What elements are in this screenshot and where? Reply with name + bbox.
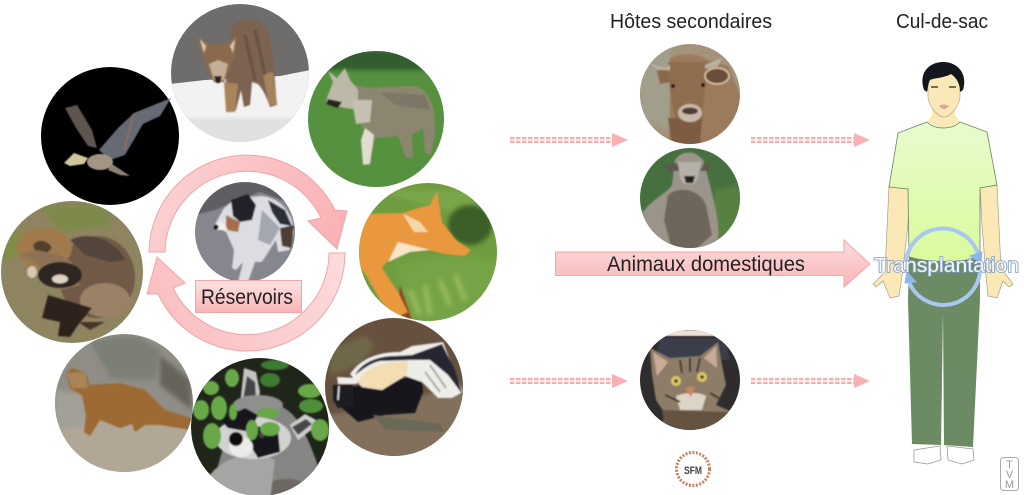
logo: TVM bbox=[1000, 458, 1018, 491]
photo: sheep bbox=[640, 148, 740, 250]
shirt bbox=[889, 122, 997, 262]
figure: human bbox=[873, 62, 1013, 464]
logo: SFM: SFM bbox=[684, 465, 702, 477]
photo: wolf bbox=[306, 50, 446, 190]
panel: secondary hosts bbox=[640, 44, 742, 432]
arms and hands bbox=[873, 185, 1013, 298]
label box: Réservoirs bbox=[196, 280, 302, 312]
neck bbox=[927, 100, 960, 130]
logo: TVM: T bbox=[1006, 459, 1013, 471]
panel: central cycle bbox=[147, 155, 347, 351]
label: Transplantation: Transplantation bbox=[874, 255, 1019, 277]
dotted arrow: cow to human bbox=[751, 133, 870, 147]
photo: bat bbox=[41, 67, 179, 205]
icon: transplantation cycle bbox=[905, 229, 982, 305]
dotted arrow: to cat bbox=[510, 374, 628, 388]
dotted arrow: cat to human bbox=[751, 374, 870, 388]
mouth bbox=[939, 104, 949, 109]
photo: coyote bbox=[170, 0, 310, 150]
logo: TVM: M bbox=[1005, 479, 1014, 491]
cycle arrow: top bbox=[149, 155, 347, 252]
photo: cow bbox=[640, 44, 742, 145]
label box: Réservoirs: Réservoirs bbox=[201, 286, 293, 309]
dotted arrow: to cow bbox=[510, 133, 628, 147]
photo: raccoon dog bbox=[0, 200, 145, 345]
face bbox=[931, 86, 956, 88]
photo: mongoose bbox=[55, 334, 195, 475]
logo: SFM bbox=[676, 452, 710, 486]
cycle arrow: bottom bbox=[147, 253, 345, 351]
arrow: Animaux domestiques: Animaux domestiques bbox=[607, 253, 805, 276]
photo: shepherd dog bbox=[195, 182, 295, 282]
heading: Cul-de-sac: Cul-de-sac bbox=[896, 11, 988, 33]
hair bbox=[922, 62, 964, 92]
logo: TVM: V bbox=[1006, 469, 1014, 481]
photo: raccoon bbox=[190, 358, 330, 495]
panel: reservoirs bbox=[0, 0, 498, 495]
photo: skunk bbox=[325, 318, 465, 460]
head bbox=[928, 72, 960, 117]
heading: Hôtes secondaires: Hôtes secondaires bbox=[610, 11, 772, 33]
photo: cat bbox=[640, 330, 740, 432]
shoes bbox=[914, 446, 974, 464]
arrow: Animaux domestiques bbox=[556, 240, 870, 287]
trousers bbox=[908, 257, 980, 447]
photo: fox bbox=[358, 183, 498, 325]
